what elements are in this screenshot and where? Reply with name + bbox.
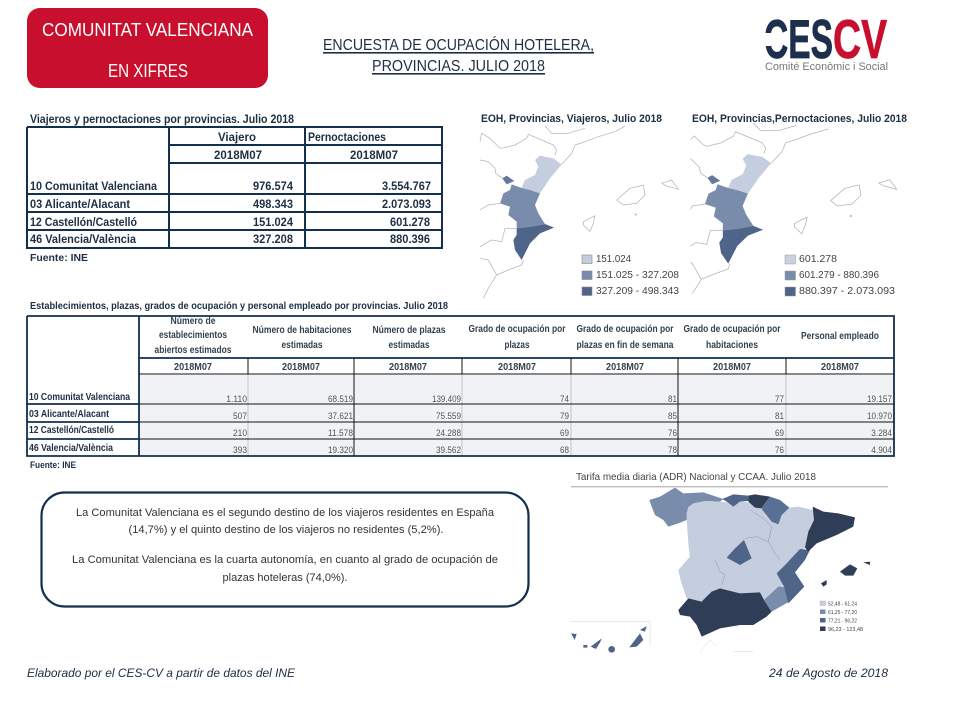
- table 1 title: Viajeros y pernoctaciones por provincias. Julio 2018: [30, 114, 295, 126]
- table 2 header: estimadas: [388, 340, 430, 351]
- table 1 rows: 327.208: [253, 232, 293, 246]
- main heading: [323, 35, 594, 75]
- table 2 values: 4.904: [871, 445, 892, 456]
- table 1 rows: 46 Valencia/València: [30, 234, 137, 246]
- table 1 rows: 498.343: [253, 197, 293, 211]
- table 2 row labels: 03 Alicante/Alacant: [29, 409, 110, 420]
- table 2 values: 24.288: [436, 428, 461, 439]
- table 2 values: 3.284: [871, 428, 892, 439]
- table 2 values: 39.562: [436, 445, 461, 456]
- table 2 values: 37.621: [328, 411, 353, 422]
- table 2 values: 210: [233, 428, 247, 439]
- map 1 shapes: [480, 126, 678, 298]
- table 2 header: estimadas: [282, 340, 323, 351]
- ADR map legend: [820, 601, 863, 633]
- ADR map title: Tarifa media diaria (ADR) Nacional y CCAA. Julio 2018: [576, 471, 816, 483]
- map: ADR Spain: [570, 471, 888, 653]
- table 2 values: 76: [668, 428, 677, 439]
- table 2 header: Grado de ocupación por: [576, 324, 674, 335]
- ADR map legend: 77,21 - 96,22: [828, 618, 857, 624]
- table 2 values: 76: [775, 445, 784, 456]
- table 1 header: 2018M07: [214, 148, 262, 162]
- footer credit: Elaborado por el CES-CV a partir de datos del INE: [27, 666, 296, 680]
- table 1 rows: 151.024: [253, 215, 293, 229]
- map 1 legend: 151.025 - 327.208: [596, 270, 679, 281]
- table 2 row labels: [29, 392, 130, 454]
- ADR map legend: 52,48 - 61,24: [828, 602, 857, 608]
- table 1 rows: 2.073.093: [382, 197, 431, 211]
- table 1 rows: 12 Castellón/Castelló: [30, 217, 137, 229]
- table 2 header: 2018M07: [389, 362, 427, 373]
- table 2 header: Grado de ocupación por: [468, 324, 566, 335]
- ADR map regions: [649, 488, 870, 637]
- table 1 rows: [30, 179, 431, 246]
- table 2 header: 2018M07: [282, 362, 320, 373]
- map 1 legend: 327.209 - 498.343: [596, 286, 679, 297]
- table 2 values: 81: [775, 411, 784, 422]
- map 2 legend: [785, 254, 895, 297]
- callout text box: La Comunitat Valenciana es el segundo destino de los viajeros residentes en España: [76, 507, 495, 519]
- table 2 header: Grado de ocupación por: [684, 324, 781, 335]
- table 2 values: [226, 394, 892, 456]
- table 1 header: Pernoctaciones: [308, 130, 386, 144]
- table 2 values: 77: [775, 394, 784, 405]
- table 2 header: Número de plazas: [372, 325, 446, 336]
- table 2 row labels: 10 Comunitat Valenciana: [29, 392, 130, 403]
- table 2 values: 85: [668, 411, 677, 422]
- table 2 source: Fuente: INE: [30, 460, 76, 471]
- red title badge: EN XIFRES: [108, 61, 188, 81]
- CES-CV logo: CV: [833, 8, 887, 70]
- table 1 rows: 976.574: [253, 179, 293, 193]
- table 2 values: 81: [668, 394, 677, 405]
- table 1 header: [214, 130, 398, 162]
- map 2 shapes: [691, 123, 897, 293]
- ADR map legend: 61,25 - 77,20: [828, 610, 857, 616]
- callout text box: (14,7%) y el quinto destino de los viajeros no residentes (5,2%).: [128, 524, 444, 536]
- table: viajeros y pernoctaciones: [27, 114, 442, 248]
- table 2 header: 2018M07: [821, 362, 859, 373]
- table 2 title: Establecimientos, plazas, grados de ocupación y personal empleado por provincias. Julio 2018: [30, 300, 448, 312]
- table 2 values: 68: [560, 445, 569, 456]
- table 2 values: 507: [233, 411, 247, 422]
- table 1 rows: 601.278: [390, 215, 430, 229]
- table 1 header: 2018M07: [350, 148, 398, 162]
- table 2 header: Personal empleado: [801, 331, 879, 342]
- table 2 header: establecimientos: [159, 330, 227, 341]
- table 2 values: 79: [560, 411, 569, 422]
- table 2 values: 10.970: [867, 411, 892, 422]
- callout text box: plazas hoteleras (74,0%).: [222, 572, 348, 584]
- table 2 values: 1.110: [226, 394, 247, 405]
- table 2 values: 68.519: [328, 394, 353, 405]
- callout text box: La Comunitat Valenciana es la cuarta autonomía, en cuanto al grado de ocupación de: [72, 554, 498, 566]
- CES-CV logo: CES: [764, 8, 833, 70]
- table 1 rows: 10 Comunitat Valenciana: [30, 181, 158, 193]
- red title badge: COMUNITAT VALENCIANA: [42, 20, 253, 40]
- table 2 row labels: 12 Castellón/Castelló: [29, 425, 114, 436]
- table 2 row labels: 46 Valencia/València: [29, 443, 113, 454]
- table 2 values: 11.578: [328, 428, 353, 439]
- table 2 values: 393: [233, 445, 247, 456]
- table 2 header: abiertos estimados: [154, 345, 232, 356]
- table 2 header: 2018M07: [713, 362, 751, 373]
- ADR map legend: 96,23 - 123,48: [828, 627, 863, 633]
- map: viajeros: [480, 113, 679, 298]
- table 1 source: Fuente: INE: [30, 253, 88, 264]
- map 1 legend: 151.024: [596, 254, 631, 265]
- table 2 values: 139.409: [432, 394, 461, 405]
- table 2 header: [154, 316, 879, 373]
- table 2 header: 2018M07: [498, 362, 536, 373]
- map 2 legend: 601.278: [799, 254, 837, 265]
- table 2 values: 69: [560, 428, 569, 439]
- table 2 header: plazas: [504, 340, 530, 351]
- main heading: ENCUESTA DE OCUPACIÓN HOTELERA,: [323, 35, 594, 54]
- table 2 header: 2018M07: [606, 362, 644, 373]
- table 1 rows: 880.396: [390, 232, 430, 246]
- table 2 values: 75.559: [436, 411, 461, 422]
- map 1 title: EOH, Provincias, Viajeros, Julio 2018: [481, 113, 662, 125]
- table 1 rows: 03 Alicante/Alacant: [30, 199, 130, 211]
- map 2 title: EOH, Provincias,Pernoctaciones, Julio 2018: [692, 113, 907, 125]
- table 2 header: Número de habitaciones: [252, 325, 352, 336]
- table 2 values: 19.157: [867, 394, 892, 405]
- table 2 header: 2018M07: [174, 362, 212, 373]
- table: establecimientos, plazas, ocupacion y personal: [27, 300, 894, 456]
- map 1 legend: [582, 254, 679, 297]
- table 2 values: 78: [668, 445, 677, 456]
- CES-CV logo: Comité Econòmic i Social: [765, 61, 888, 73]
- table 2 header: plazas en fin de semana: [576, 340, 674, 351]
- map 2 legend: 880.397 - 2.073.093: [799, 286, 895, 297]
- red title badge: [27, 8, 268, 88]
- callout text box: [42, 492, 528, 606]
- table 2 header: habitaciones: [706, 340, 758, 351]
- footer date: 24 de Agosto de 2018: [768, 666, 888, 680]
- table 2 values: 19.320: [328, 445, 353, 456]
- main heading: PROVINCIAS. JULIO 2018: [372, 58, 545, 75]
- table 1 rows: 3.554.767: [382, 179, 431, 193]
- table 1 header: Viajero: [218, 130, 256, 144]
- map 2 legend: 601.279 - 880.396: [799, 270, 879, 281]
- table 2 header: Número de: [170, 316, 216, 327]
- map: pernoctaciones: [691, 113, 907, 297]
- table 2 values: 74: [560, 394, 569, 405]
- Canary Islands inset: [570, 622, 753, 653]
- table 2 values: 69: [775, 428, 784, 439]
